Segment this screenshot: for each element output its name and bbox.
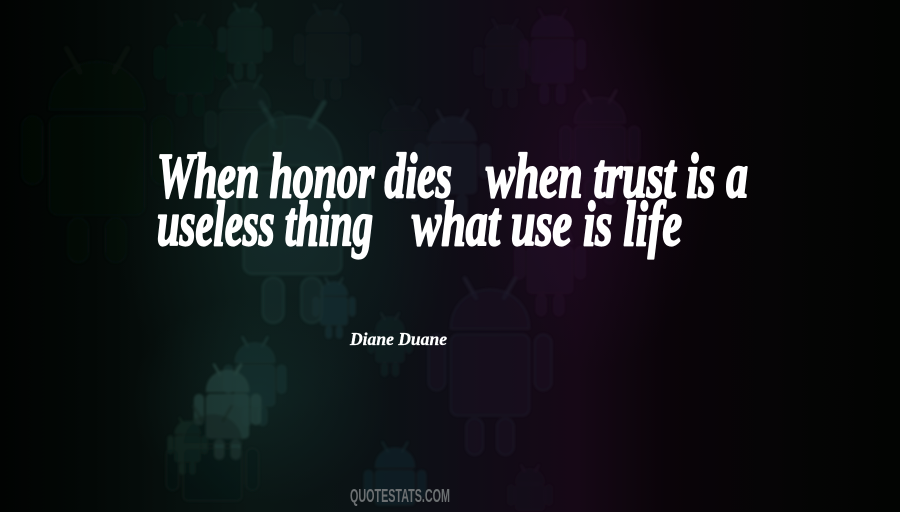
android pattern — [22, 4, 640, 510]
quote line 2: useless thing — [157, 188, 373, 259]
quote line 2: what use is life — [412, 188, 682, 259]
watermark: QUOTESTATS.COM — [350, 486, 450, 506]
author name: Diane Duane — [349, 329, 447, 349]
quote text — [157, 140, 748, 259]
quote line 2 — [157, 188, 682, 259]
background glow: teal lower — [130, 295, 390, 505]
background glow: purple — [470, 10, 710, 370]
quote line 1: When honor dies — [157, 140, 452, 211]
quote line 1: when trust is a — [486, 140, 748, 211]
background glow: teal — [115, 40, 455, 420]
